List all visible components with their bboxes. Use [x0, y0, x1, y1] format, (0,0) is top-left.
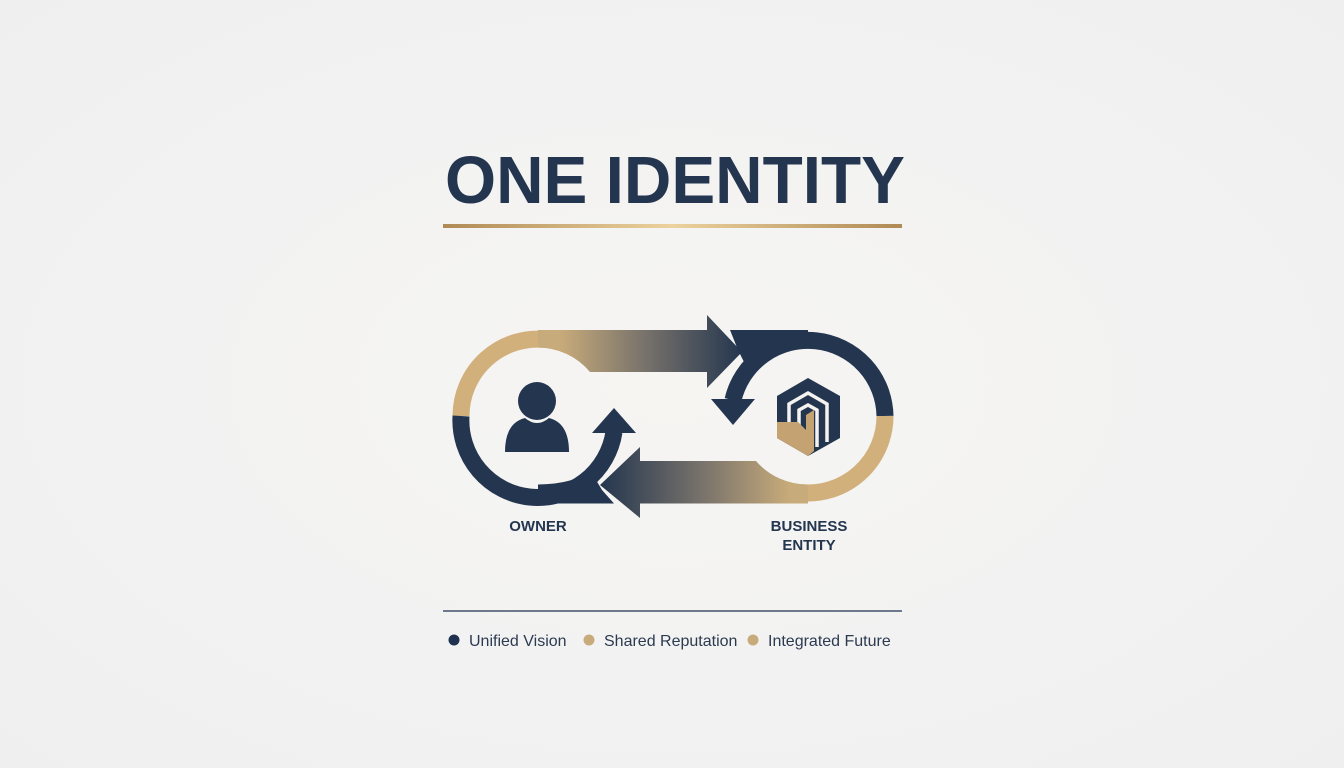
bottom arrow band: [600, 447, 808, 518]
cycle diagram: [461, 315, 885, 518]
right ring top-left fill: [730, 330, 808, 370]
arrowhead up: [592, 408, 636, 433]
right ring dark with downward arrow: [733, 340, 885, 416]
icon: person: [505, 382, 569, 452]
label: owner: OWNER: [509, 518, 567, 535]
legend: Unified Vision: [469, 633, 567, 650]
arrowhead down: [711, 399, 755, 425]
label: business entity: BUSINESS: [771, 518, 847, 535]
icon: business hexagon logo: [777, 378, 840, 456]
left ring bottom-right fill: [538, 470, 614, 504]
label: business entity: ENTITY: [782, 537, 836, 554]
legend: Shared Reputation: [604, 633, 737, 650]
right ring bottom gold: [800, 416, 885, 493]
legend: Integrated Future: [768, 633, 891, 650]
left ring bottom dark with upward arrow: [461, 416, 614, 497]
legend: [448, 633, 891, 650]
divider line: [443, 610, 902, 612]
title underline: [443, 224, 902, 228]
title: ONE IDENTITY: [445, 143, 905, 218]
top arrow band: [538, 315, 742, 388]
left ring top (gold): [461, 339, 546, 416]
